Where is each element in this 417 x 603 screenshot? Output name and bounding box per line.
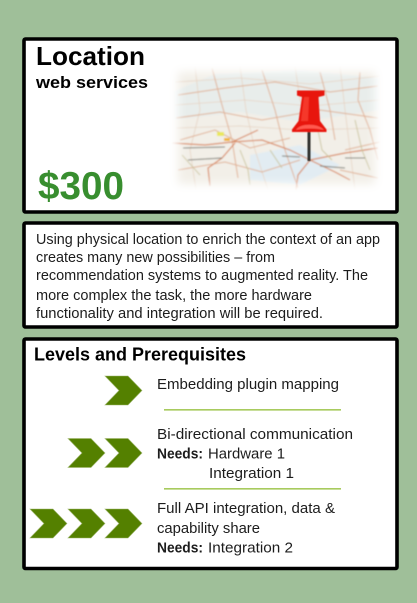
- panel: description: [24, 223, 397, 327]
- level 3 text: Integration 2: [208, 540, 293, 556]
- level 2 text: Integration 1: [209, 465, 294, 482]
- level 1 text: Embedding plugin mapping: [157, 376, 339, 393]
- subheading: web services: web services: [35, 73, 148, 92]
- level 3 text: capability share: [157, 520, 260, 537]
- description text: more complex the task, the more hardware: [36, 287, 312, 304]
- level 2 text: Needs:: [157, 446, 203, 462]
- level 2 text: Bi-directional communication: [157, 426, 353, 443]
- image: map with red push pin: [172, 68, 380, 190]
- panel: levels and prerequisites: [24, 339, 397, 568]
- level 2 text: Hardware 1: [208, 446, 285, 462]
- icon: three chevrons: [30, 509, 142, 538]
- description text: functionality and integration will be required.: [36, 305, 323, 322]
- level 3 text: Full API integration, data &: [157, 500, 335, 517]
- icon: two chevrons: [68, 438, 142, 468]
- heading: Levels and Prerequisites: Levels and Prerequisites: [34, 344, 246, 364]
- description text: Using physical location to enrich the context of an app: [36, 231, 380, 248]
- level 2 text: [157, 426, 353, 482]
- heading: Location: Location: [36, 41, 145, 71]
- description text: creates many new possibilities – from: [36, 249, 275, 266]
- icon: red push pin: [292, 90, 326, 161]
- panel: location header: [24, 39, 397, 212]
- level 3 text: [157, 500, 335, 556]
- description text: recommendation systems to augmented reality. The: [36, 267, 368, 284]
- level 3 text: Needs:: [157, 540, 203, 556]
- price: $300: [38, 165, 124, 208]
- description text: [36, 231, 380, 322]
- icon: one chevron: [105, 376, 142, 405]
